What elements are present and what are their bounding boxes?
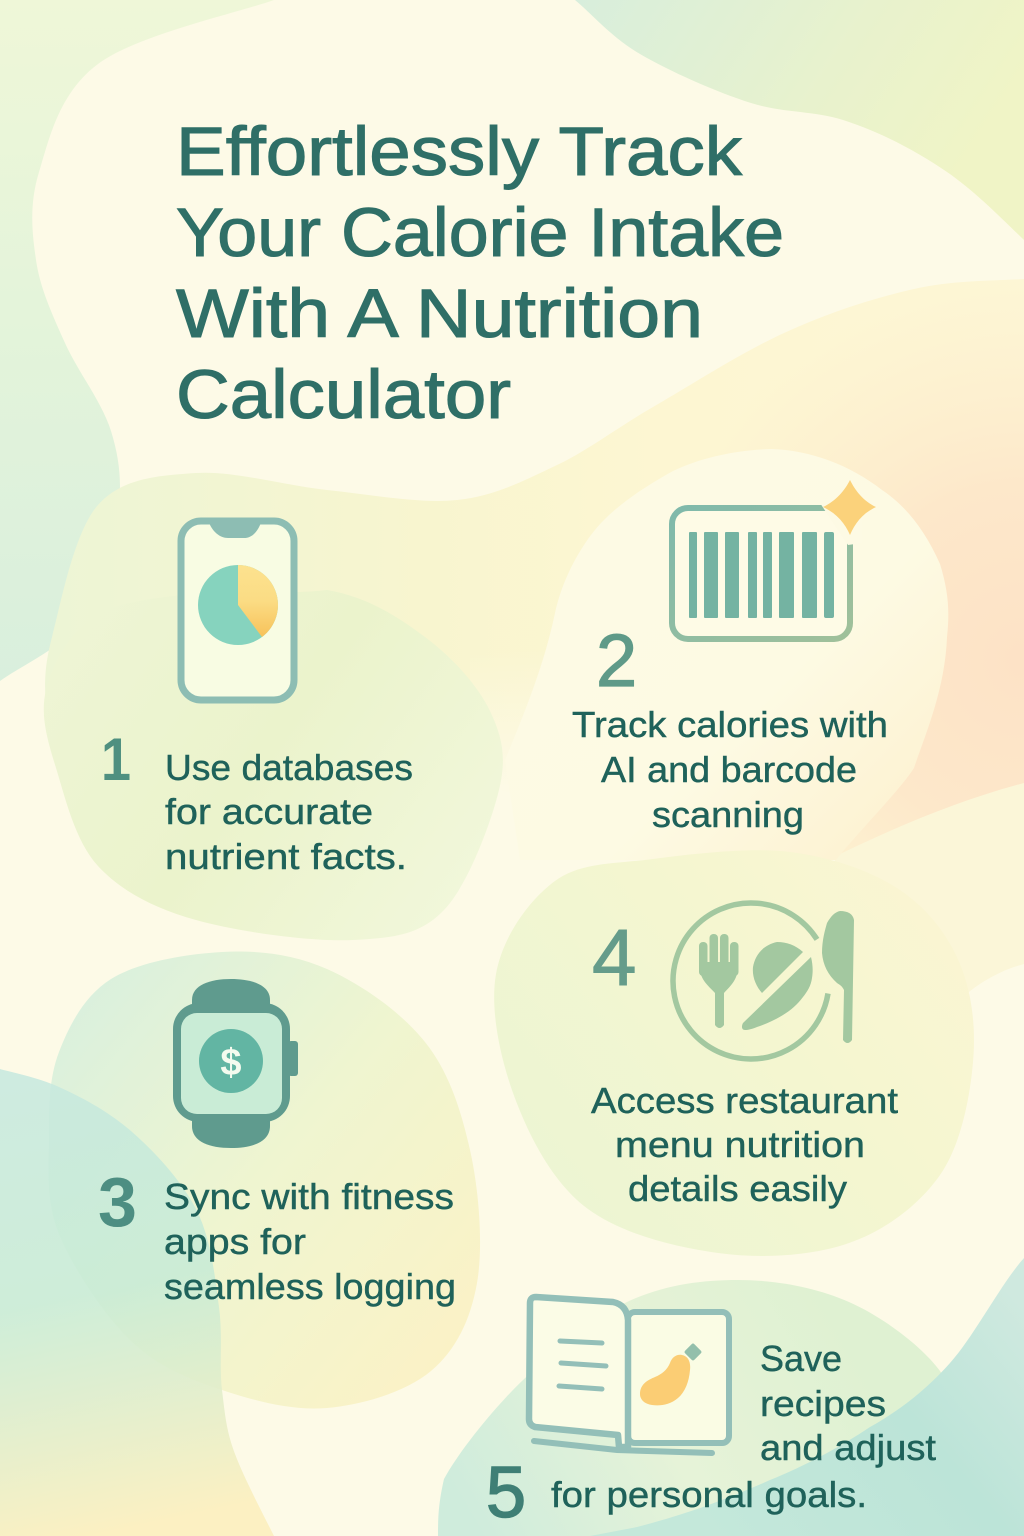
text: step 1: for accurate — [165, 791, 373, 832]
title: Calculator — [176, 356, 511, 433]
text: step 2: scanning — [652, 794, 804, 835]
number 3: 3 — [98, 1163, 137, 1241]
icon: smartwatch — [173, 979, 298, 1148]
text: step 1 — [165, 747, 413, 877]
icon: plate with fork, leaf and knife — [673, 903, 854, 1059]
text: step 5: recipes — [760, 1383, 886, 1424]
text: step 3: seamless logging — [164, 1266, 456, 1307]
number 5: 5 — [486, 1453, 526, 1533]
text: step 5: Save — [760, 1338, 842, 1379]
text: step 5: and adjust — [760, 1427, 936, 1468]
panel: step 2 barcode — [572, 480, 888, 835]
text: step 2 — [572, 704, 888, 835]
title — [176, 113, 784, 433]
text: step 1: nutrient facts. — [165, 836, 407, 877]
panel: step 4 restaurant menu — [591, 903, 898, 1209]
text: step 3 — [164, 1176, 456, 1307]
text: step 4: menu nutrition — [615, 1124, 865, 1165]
text: step 3: apps for — [164, 1221, 306, 1262]
icon: smartwatch: $ — [220, 1042, 242, 1084]
text: step 4 — [591, 1080, 898, 1209]
panel: step 5 recipes — [486, 1297, 936, 1533]
icon: open recipe book — [529, 1297, 729, 1453]
icon: phone with pie chart — [181, 520, 294, 700]
number 4: 4 — [592, 913, 636, 1002]
title: With A Nutrition — [176, 275, 703, 352]
text: step 5 — [551, 1338, 936, 1515]
text: step 2: AI and barcode — [601, 749, 857, 790]
icon: barcode with sparkle — [672, 480, 876, 639]
text: step 1: Use databases — [165, 747, 413, 788]
text: step 4: Access restaurant — [591, 1080, 898, 1121]
title: Your Calorie Intake — [176, 194, 784, 271]
text: step 2: Track calories with — [572, 704, 888, 745]
text: step 5: for personal goals. — [551, 1474, 867, 1515]
text: step 4: details easily — [628, 1168, 847, 1209]
number 2: 2 — [596, 619, 637, 702]
panel: step 3 fitness sync — [98, 979, 456, 1307]
number 1: 1 — [101, 726, 131, 793]
title: Effortlessly Track — [176, 113, 743, 190]
text: step 3: Sync with fitness — [164, 1176, 454, 1217]
panel: step 1 databases — [101, 520, 413, 877]
